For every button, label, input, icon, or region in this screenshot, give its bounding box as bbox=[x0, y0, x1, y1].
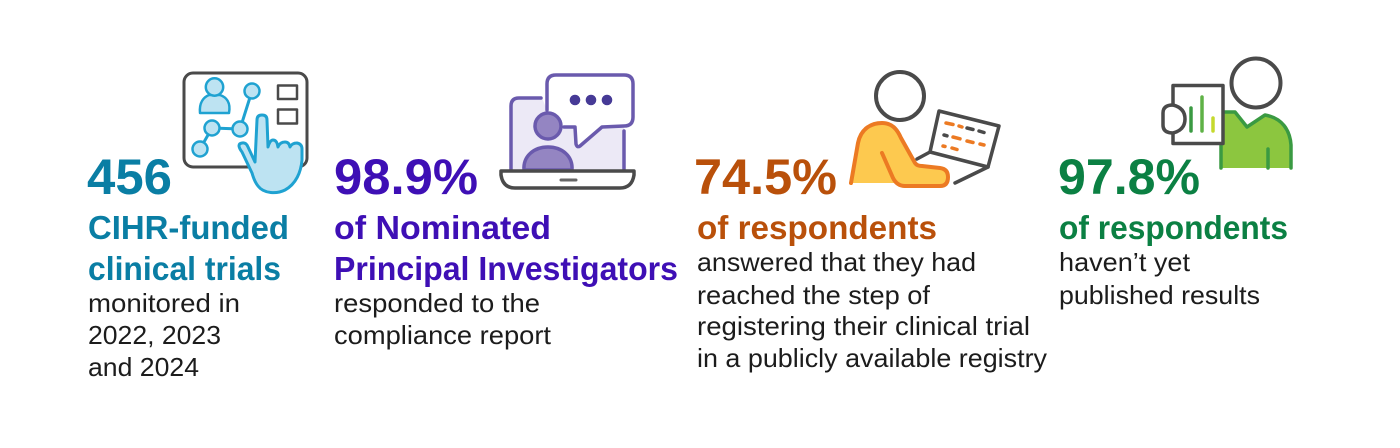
statistic: 98.9%: 98.9% bbox=[334, 149, 478, 205]
text: monitored years: monitored in bbox=[88, 288, 240, 318]
panel: respondents not yet published bbox=[1058, 58, 1291, 310]
text: monitored years: 2022, 2023 bbox=[88, 320, 221, 350]
text: responded to the compliance report: responded to the bbox=[334, 288, 540, 318]
heading: of Nominated Principal Investigators: Principal Investigators bbox=[334, 250, 678, 287]
text: haven't yet published results: haven’t yet bbox=[1059, 247, 1191, 277]
statistic: 97.8%: 97.8% bbox=[1058, 149, 1200, 205]
icon: person with chart tablet bbox=[1163, 58, 1291, 168]
heading: of Nominated Principal Investigators bbox=[334, 209, 678, 287]
text: monitored years bbox=[88, 288, 240, 382]
text: responded to the compliance report: compliance report bbox=[334, 320, 552, 350]
text: registering clinical trial: reached the step of bbox=[697, 280, 931, 310]
heading: of respondents: of respondents bbox=[1059, 209, 1288, 246]
panel: clinical trials monitored bbox=[87, 73, 307, 382]
statistic: 74.5%: 74.5% bbox=[694, 149, 837, 205]
text: monitored years: and 2024 bbox=[88, 352, 199, 382]
text: registering clinical trial: answered that they had bbox=[697, 247, 976, 277]
text: registering clinical trial: registering their clinical trial bbox=[697, 311, 1030, 341]
text: haven't yet published results: published results bbox=[1059, 280, 1260, 310]
icon: touch screen network bbox=[184, 73, 307, 193]
text: registering clinical trial bbox=[697, 247, 1047, 373]
panel: respondents registered bbox=[694, 72, 1047, 373]
heading: of Nominated Principal Investigators: of Nominated bbox=[334, 209, 551, 246]
icon: person at laptop bbox=[851, 72, 999, 186]
text: responded to the compliance report bbox=[334, 288, 552, 350]
heading: CIHR-funded clinical trials bbox=[88, 209, 289, 287]
panel: nominated principal investigators bbox=[334, 75, 678, 350]
icon: laptop video call bbox=[501, 75, 634, 188]
heading: CIHR-funded clinical trials: CIHR-funded bbox=[88, 209, 289, 246]
heading: CIHR-funded clinical trials: clinical trials bbox=[88, 250, 281, 287]
heading: of respondents: of respondents bbox=[697, 209, 937, 246]
text: haven't yet published results bbox=[1059, 247, 1260, 310]
text: registering clinical trial: in a publicly available registry bbox=[697, 343, 1047, 373]
statistic: 456: 456 bbox=[87, 149, 172, 205]
